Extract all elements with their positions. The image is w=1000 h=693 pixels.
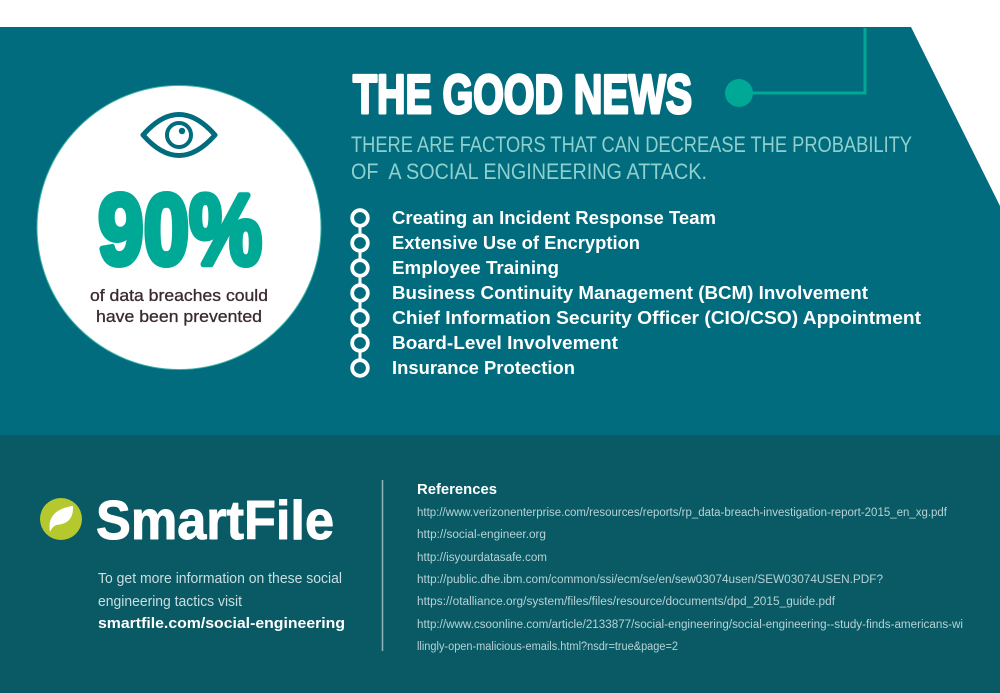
- connector line with dot: [725, 28, 865, 107]
- reference links: https://otalliance.org/system/files/files/resource/documents/dpd_2015_guide.pdf: [417, 596, 836, 608]
- list of factors: Extensive Use of Encryption: [392, 233, 640, 253]
- list of factors: Creating an Incident Response Team: [392, 208, 716, 228]
- list of factors: [392, 208, 921, 378]
- list of factors: Chief Information Security Officer (CIO/CSO) Appointment: [392, 308, 921, 328]
- call to action: To get more information on these social: [98, 571, 342, 587]
- icon: SmartFile leaf logo: [40, 498, 82, 540]
- stat caption: of data breaches could: [90, 287, 268, 305]
- divider: [382, 480, 384, 651]
- subheading: OF A SOCIAL ENGINEERING ATTACK.: [351, 159, 707, 184]
- panel: footer: [0, 435, 1000, 693]
- reference links: [417, 507, 963, 653]
- reference links: http://www.verizonenterprise.com/resources/reports/rp_data-breach-investigation-report-2015_en_xg.pdf: [417, 507, 948, 519]
- reference links: llingly-open-malicious-emails.html?nsdr=true&page=2: [417, 641, 678, 653]
- stat: 90%: 90%: [98, 174, 262, 286]
- reference links: http://public.dhe.ibm.com/common/ssi/ecm/se/en/sew03074usen/SEW03074USEN.PDF?: [417, 574, 883, 586]
- call to action: engineering tactics visit: [98, 594, 242, 610]
- stat caption: [90, 287, 268, 326]
- SmartFile wordmark: SmartFile: [96, 489, 334, 551]
- reference links: http://social-engineer.org: [417, 529, 546, 541]
- call to action: [98, 571, 345, 632]
- panel: the good news: [0, 27, 1000, 435]
- list markers: [352, 210, 368, 376]
- list of factors: Employee Training: [392, 258, 559, 278]
- list of factors: Business Continuity Management (BCM) Involvement: [392, 283, 868, 303]
- heading: THE GOOD NEWS: [353, 63, 692, 125]
- list of factors: Board-Level Involvement: [392, 333, 618, 353]
- references heading: References: [417, 482, 497, 498]
- stat caption: have been prevented: [96, 308, 262, 326]
- list of factors: Insurance Protection: [392, 358, 575, 378]
- references: [417, 482, 963, 653]
- reference links: http://isyourdatasafe.com: [417, 552, 547, 564]
- reference links: http://www.csoonline.com/article/2133877/social-engineering/social-engineering--study-finds-americans-wi: [417, 619, 963, 631]
- icon: eye: [143, 114, 215, 156]
- call to action: smartfile.com/social-engineering: [98, 616, 345, 632]
- subheading: [351, 132, 912, 184]
- stat circle: [37, 86, 321, 370]
